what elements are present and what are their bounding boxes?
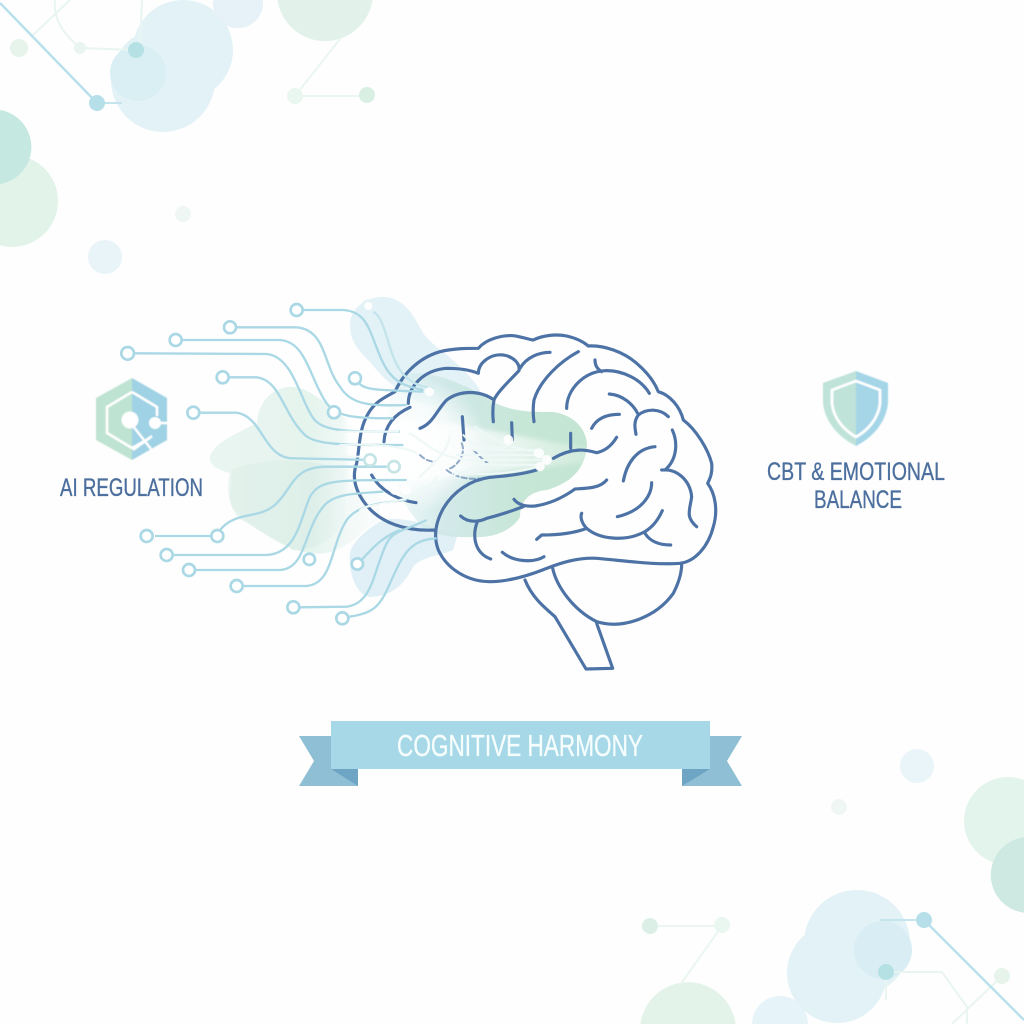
banner title: COGNITIVE HARMONY xyxy=(397,728,643,763)
faded dashed folds under signals xyxy=(420,443,492,479)
banner: Cognitive Harmony xyxy=(299,721,742,786)
label: CBT and Emotional Balance: BALANCE xyxy=(814,486,902,514)
converging light lines xyxy=(340,427,540,510)
ribbon left tail xyxy=(299,736,358,786)
ribbon main band xyxy=(331,721,710,769)
backdrop blobs behind circuit and brain xyxy=(210,297,595,597)
brain outer contour xyxy=(354,335,716,582)
cerebellum xyxy=(553,564,682,624)
icon: shield xyxy=(823,371,888,446)
signal lines and nodes over brain xyxy=(340,387,552,511)
blob: lower blue xyxy=(350,519,457,597)
blob: brain green glow xyxy=(386,373,587,537)
label: AI Regulation: AI REGULATION xyxy=(60,474,203,502)
white nodes in brain xyxy=(379,387,552,511)
circuit traces from AI Regulation into brain xyxy=(135,310,437,617)
circuit end-point nodes xyxy=(121,301,400,624)
panel: AI Regulation xyxy=(60,378,203,502)
label: CBT and Emotional Balance: CBT & EMOTIONAL xyxy=(767,458,945,486)
blob: white glow at signal convergence xyxy=(343,377,487,513)
ribbon folds xyxy=(331,769,710,786)
panel: CBT and Emotional Balance xyxy=(767,371,945,514)
blob: left green xyxy=(210,387,380,554)
brain stem xyxy=(525,580,613,669)
icon: circuit hexagon xyxy=(96,378,167,460)
decoration: top-left network bubbles xyxy=(0,0,375,274)
blob: left inner green xyxy=(230,461,345,550)
brain folds xyxy=(372,352,697,561)
blob: white streak along converging signals xyxy=(345,415,595,490)
brain line drawing xyxy=(354,335,716,669)
blob: upper blue xyxy=(350,297,484,416)
ribbon right tail xyxy=(682,736,742,786)
decoration: bottom-right network bubbles xyxy=(640,749,1024,1024)
